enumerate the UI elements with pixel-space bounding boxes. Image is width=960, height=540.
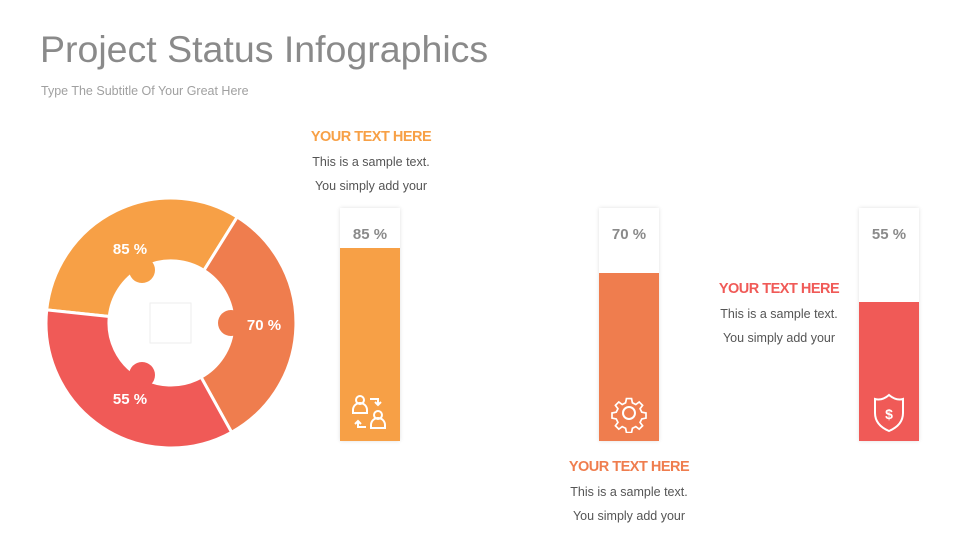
text block 1: This is a sample text. — [312, 155, 430, 169]
text block 3: YOUR TEXT HERE — [719, 281, 839, 297]
bar 1: 85% — [340, 208, 400, 441]
text block 3: You simply add your — [723, 331, 835, 345]
text block 2: This is a sample text. — [570, 485, 688, 499]
text block 1 — [311, 129, 432, 193]
icon: shield dollar: $ — [885, 406, 893, 422]
segment: 85% — [47, 198, 237, 316]
bar 2: 70%: 70 % — [612, 226, 646, 243]
bar 3: 55% — [859, 208, 919, 441]
icon: gear — [611, 398, 647, 433]
bar 1: 85%: 85 % — [353, 226, 387, 243]
segment: 70%: 70 % — [247, 317, 281, 334]
segment: 55% — [46, 310, 232, 448]
text block 2 — [569, 459, 690, 523]
title: Project Status Infographics — [40, 28, 488, 70]
bar 3: 55%: 55 % — [872, 226, 906, 243]
text block 1: YOUR TEXT HERE — [311, 129, 431, 145]
icon: shield dollar — [874, 394, 904, 432]
segment: 55%: 55 % — [113, 391, 147, 408]
text block 3: This is a sample text. — [720, 307, 838, 321]
icon: people exchange — [352, 395, 386, 429]
subtitle: Type The Subtitle Of Your Great Here — [41, 84, 249, 98]
text block 2: You simply add your — [573, 509, 685, 523]
donut chart — [48, 200, 294, 446]
text block 2: YOUR TEXT HERE — [569, 459, 689, 475]
segment: 70% — [201, 217, 296, 432]
text block 3 — [719, 281, 840, 345]
segment: 85%: 85 % — [113, 241, 147, 258]
text block 1: You simply add your — [315, 179, 427, 193]
bar 2: 70% — [599, 208, 659, 441]
center square — [150, 303, 191, 343]
